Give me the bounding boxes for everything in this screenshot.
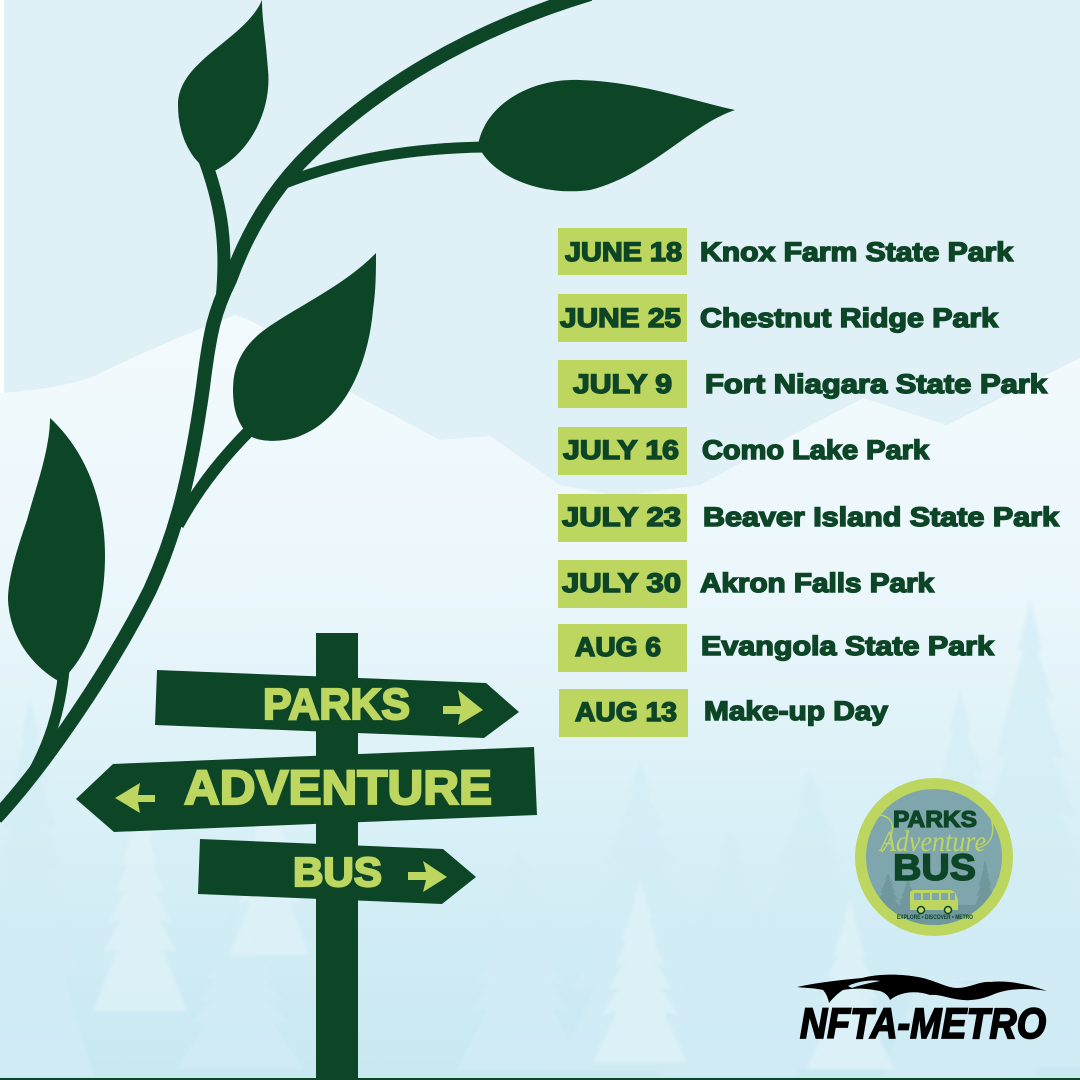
- vine with leaves: [0, 0, 735, 818]
- row: Aug 6: Evangola State Park: [701, 631, 995, 661]
- bottom edge line: [0, 1078, 1080, 1080]
- badge: Parks Adventure Bus: PARKS: [893, 806, 977, 832]
- row: July 30: Akron Falls Park: [700, 568, 935, 598]
- row: Aug 13: [559, 689, 888, 737]
- logo: NFTA-Metro: [797, 975, 1047, 1048]
- sign: parks: PARKS: [263, 680, 410, 729]
- sign: bus: [198, 839, 476, 904]
- row: July 16: Como Lake Park: [702, 435, 930, 465]
- row: Aug 13: Make-up Day: [704, 696, 888, 726]
- row: Aug 6: [558, 624, 995, 672]
- row: July 16: JULY 16: [563, 435, 679, 465]
- row: Aug 13: AUG 13: [575, 697, 677, 727]
- badge: Parks Adventure Bus: Adventure: [878, 825, 986, 858]
- row: July 9: JULY 9: [573, 369, 672, 399]
- sign: adventure: ADVENTURE: [184, 762, 492, 815]
- sign: bus: BUS: [293, 849, 382, 895]
- schedule list: [558, 228, 1060, 737]
- sign: parks: [155, 670, 519, 738]
- row: July 23: Beaver Island State Park: [703, 502, 1060, 532]
- vine stems: [0, 0, 590, 818]
- row: July 16: [558, 427, 930, 475]
- row: June 25: Chestnut Ridge Park: [700, 303, 999, 333]
- row: July 30: [558, 560, 935, 608]
- row: July 23: [558, 494, 1060, 542]
- sign: adventure: [76, 747, 537, 832]
- row: July 30: JULY 30: [562, 568, 681, 598]
- row: June 18: Knox Farm State Park: [700, 237, 1014, 267]
- leaf: middle: [233, 253, 376, 441]
- leaf: top: [178, 0, 268, 172]
- row: July 9: Fort Niagara State Park: [705, 369, 1048, 399]
- leaf: lower left: [8, 418, 105, 682]
- row: June 25: [558, 294, 999, 342]
- row: Aug 6: AUG 6: [575, 632, 661, 662]
- post: [316, 633, 358, 1080]
- logo: NFTA-Metro: NFTA-METRO: [800, 1000, 1046, 1048]
- row: June 25: JUNE 25: [560, 303, 681, 333]
- badge: Parks Adventure Bus: BUS: [893, 847, 976, 888]
- badge: Parks Adventure Bus: EXPLORE • DISCOVER • METRO: [897, 915, 973, 921]
- signpost: [76, 633, 537, 1080]
- row: June 18: JUNE 18: [565, 237, 682, 267]
- logo swoosh: [797, 975, 1047, 1003]
- badge: Parks Adventure Bus: [855, 778, 1013, 938]
- leaf: right: [478, 80, 735, 191]
- row: July 9: [558, 360, 1048, 408]
- row: July 23: JULY 23: [562, 502, 681, 532]
- icon: bus: [910, 890, 958, 914]
- row: June 18: [558, 228, 1014, 275]
